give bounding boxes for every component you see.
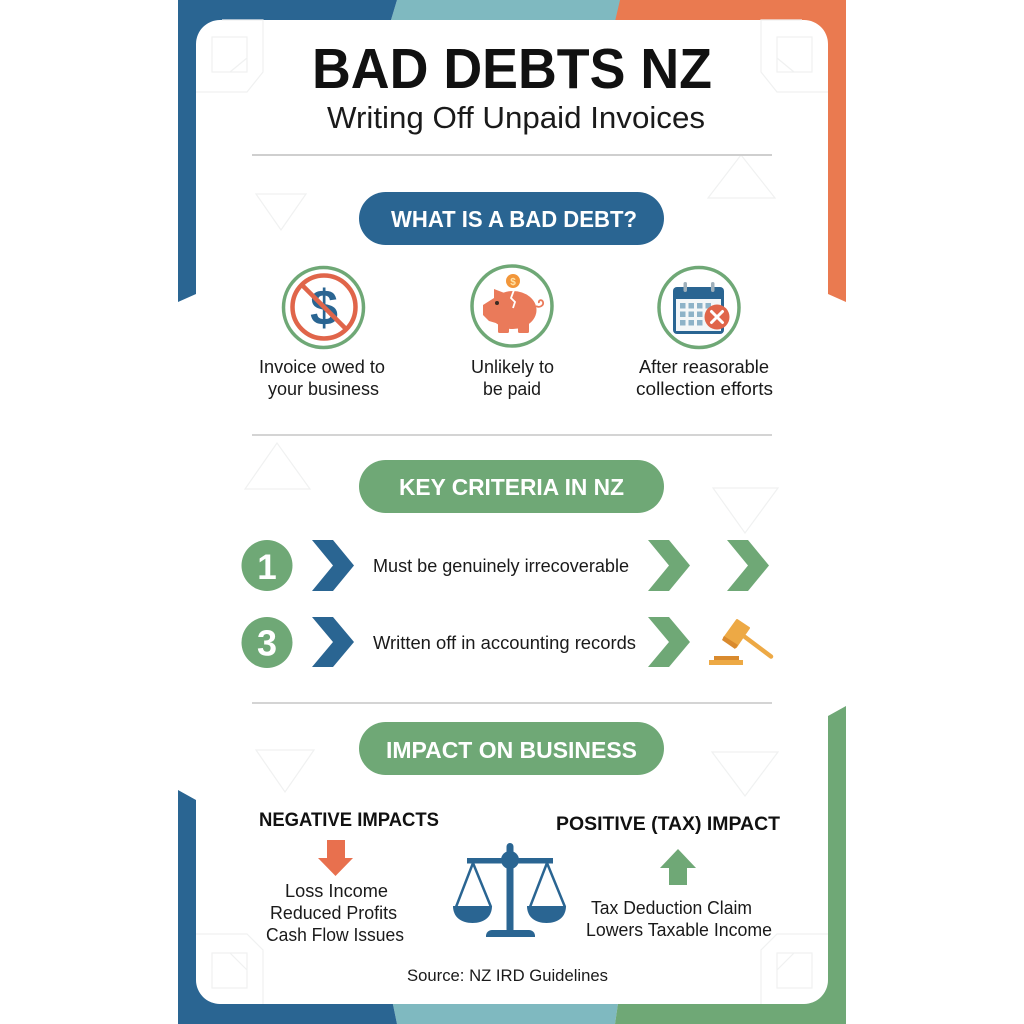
- text: negative list: Cash Flow Issues: [266, 925, 404, 945]
- arrow: up: [660, 849, 696, 885]
- heading: positive impact: POSITIVE (TAX) IMPACT: [556, 814, 780, 835]
- icon: balance scales: [453, 843, 566, 937]
- section heading: key criteria: KEY CRITERIA IN NZ: [399, 474, 624, 500]
- text: negative list: Loss Income: [285, 881, 388, 901]
- icon: cracked piggy bank: $: [510, 277, 516, 288]
- divider: [252, 154, 772, 156]
- section heading: what is a bad debt: [359, 192, 664, 245]
- heading: negative impacts: NEGATIVE IMPACTS: [259, 810, 439, 831]
- text: unlikely to be paid: be paid: [483, 379, 541, 399]
- text: unlikely to be paid: [471, 357, 554, 399]
- text: positive list: [586, 898, 772, 940]
- icon: cracked piggy bank: [472, 266, 552, 346]
- text: after reasonable efforts: [636, 357, 773, 399]
- section heading: key criteria: [359, 460, 664, 513]
- coloured frame: [178, 0, 846, 1024]
- text: invoice owed: your business: [268, 379, 379, 399]
- text: unlikely to be paid: Unlikely to: [471, 357, 554, 377]
- section heading: impact on business: IMPACT ON BUSINESS: [386, 737, 637, 763]
- source note: Source: NZ IRD Guidelines: [407, 966, 608, 985]
- text: after reasonable efforts: collection efforts: [636, 379, 773, 399]
- text: positive list: Lowers Taxable Income: [586, 920, 772, 940]
- divider: [252, 702, 772, 704]
- criterion row 1: Must be genuinely irrecoverable: [373, 556, 629, 576]
- text: invoice owed: Invoice owed to: [259, 357, 385, 377]
- text: negative list: Reduced Profits: [270, 903, 397, 923]
- white card: [196, 20, 828, 1004]
- section heading: what is a bad debt: WHAT IS A BAD DEBT?: [391, 206, 637, 232]
- text: invoice owed: [259, 357, 385, 399]
- icon: calendar with x: [659, 268, 739, 348]
- text: positive list: Tax Deduction Claim: [591, 898, 752, 918]
- section heading: impact on business: [359, 722, 664, 775]
- subtitle: Writing Off Unpaid Invoices: [327, 100, 705, 135]
- text: negative list: [266, 881, 404, 945]
- criterion row 1: 1: [257, 548, 277, 587]
- criterion row 2: Written off in accounting records: [373, 633, 636, 653]
- criterion row 2: [242, 617, 690, 668]
- divider: [252, 434, 772, 436]
- icon: no dollar: $: [310, 280, 338, 336]
- title: BAD DEBTS NZ: [312, 37, 712, 101]
- arrow: down: [318, 840, 353, 876]
- text: after reasonable efforts: After reasorable: [639, 357, 769, 377]
- decorative corner and triangle outlines: [196, 20, 828, 1004]
- icon: no dollar: [284, 268, 364, 348]
- icon: gavel: [709, 620, 771, 665]
- criterion row 2: 3: [257, 622, 277, 664]
- criterion row 1: [242, 540, 769, 591]
